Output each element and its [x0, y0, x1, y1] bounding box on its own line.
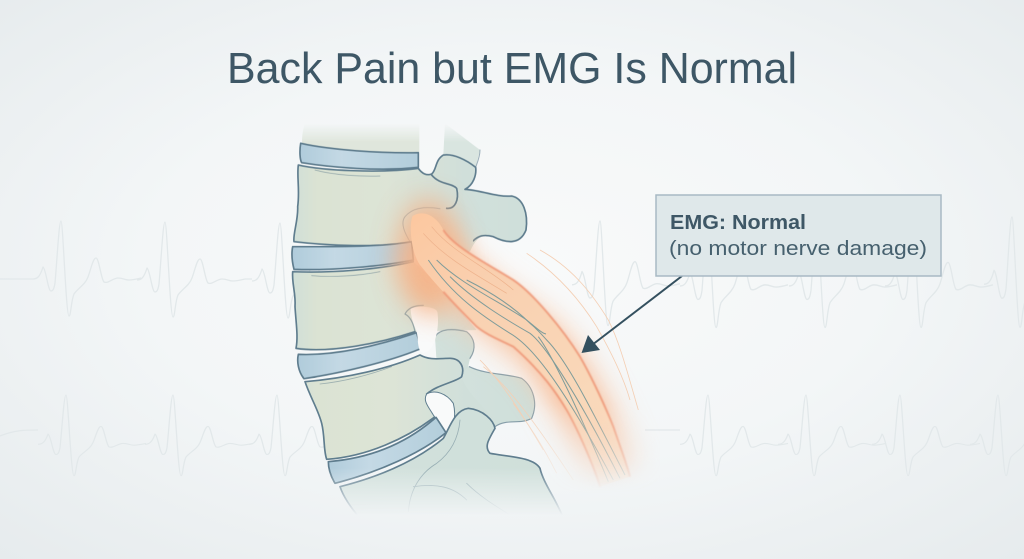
foramen rim 1: [403, 208, 440, 242]
nerve fibres: [428, 260, 625, 482]
title: Back Pain but EMG Is Normal: [227, 44, 797, 93]
upper vertebra stub: [302, 130, 420, 152]
vertebra 3 outline: [305, 355, 463, 459]
foramen rim 2: [405, 305, 423, 332]
inner glow: [461, 244, 629, 469]
superior articular lobe: [435, 330, 474, 373]
arrow head: [582, 335, 600, 353]
vertebra 2 outline: [293, 262, 415, 350]
nerve glow: [397, 198, 613, 480]
outer glow: [420, 243, 613, 480]
callout heading: EMG: Normal: [670, 212, 806, 234]
EMG waveform background upper: [0, 217, 1024, 327]
callout: [656, 195, 941, 276]
foramen gap 2: [411, 307, 438, 353]
vertebra 1 outline: [294, 155, 476, 246]
transverse process lower outline: [469, 367, 535, 427]
body highlight 1: [315, 170, 380, 176]
upper facet outline: [476, 150, 480, 167]
vertebra 1: [294, 155, 476, 257]
body highlight 3: [320, 367, 392, 384]
EMG waveform background lower: [0, 395, 1024, 476]
upper facet stub: [444, 130, 480, 166]
foramen gap 3: [425, 392, 455, 435]
vertebra 2: [293, 262, 477, 350]
lobe outline: [435, 330, 474, 358]
nerve body: [411, 213, 630, 487]
nerve edges: [443, 230, 630, 487]
sacrum: [340, 408, 563, 518]
pedicle detail 1: [432, 175, 457, 208]
callout note: (no motor nerve damage): [669, 237, 927, 260]
foramen glow: [397, 198, 460, 315]
callout box: [656, 195, 941, 276]
illustration: lumbar spine and nerve: [292, 123, 638, 518]
disc 2: [292, 242, 413, 270]
arrow shaft: [592, 276, 682, 345]
nerve strands pale: [423, 227, 513, 293]
transverse process upper: [447, 190, 527, 252]
nerve wisps: [480, 250, 638, 480]
transverse process lower: [460, 367, 535, 427]
disc 4: [328, 417, 446, 483]
sacrum detail lines: [408, 420, 498, 508]
nerve root: [411, 213, 630, 487]
body highlight 2: [312, 272, 380, 276]
transverse process upper outline: [465, 189, 527, 242]
disc 3: [298, 333, 421, 379]
arrow: [582, 276, 682, 353]
spine bones and discs: [292, 123, 563, 518]
disc 1: [300, 143, 418, 169]
vertebra 3: [306, 356, 466, 458]
